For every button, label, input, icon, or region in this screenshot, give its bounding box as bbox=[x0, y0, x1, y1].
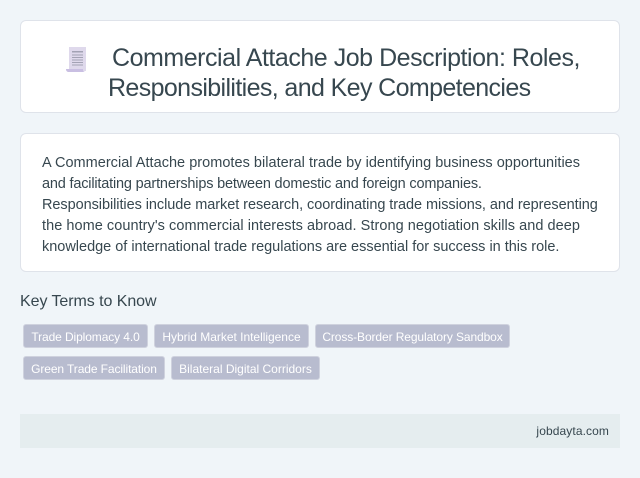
tag: Green Trade Facilitation bbox=[31, 362, 157, 376]
tag list bbox=[23, 324, 510, 380]
tag bbox=[154, 324, 309, 348]
text block: description: A Commercial Attache promotes bilateral trade by identifying business opportunities bbox=[42, 155, 580, 171]
tag bbox=[315, 324, 510, 348]
tag bbox=[171, 356, 320, 380]
icon: document receipt bbox=[66, 47, 86, 72]
footer bar bbox=[20, 414, 620, 448]
title: Responsibilities, and Key Competencies bbox=[108, 74, 531, 102]
text block: description: Responsibilities include market research, coordinating trade missions, and representing bbox=[42, 197, 598, 213]
panel: title card bbox=[20, 20, 620, 113]
title: Commercial Attache Job Description: Roles, bbox=[112, 44, 580, 72]
tag bbox=[23, 324, 148, 348]
tag bbox=[23, 356, 165, 380]
text block: description: the home country's commercial interests abroad. Strong negotiation skills and deep bbox=[42, 218, 580, 234]
text block: description bbox=[42, 155, 598, 255]
footer text: jobdayta.com bbox=[536, 424, 609, 438]
heading: key terms: Key Terms to Know bbox=[20, 293, 157, 310]
tag: Cross-Border Regulatory Sandbox bbox=[322, 330, 503, 344]
text block: description: and facilitating partnerships between domestic and foreign companies. bbox=[42, 176, 482, 192]
tag: Bilateral Digital Corridors bbox=[179, 362, 312, 376]
tag: Hybrid Market Intelligence bbox=[162, 330, 301, 344]
tag: Trade Diplomacy 4.0 bbox=[31, 330, 140, 344]
text block: description: knowledge of international trade regulations are essential for success in this role. bbox=[42, 239, 559, 255]
title bbox=[108, 44, 580, 102]
panel: description bbox=[20, 133, 620, 272]
